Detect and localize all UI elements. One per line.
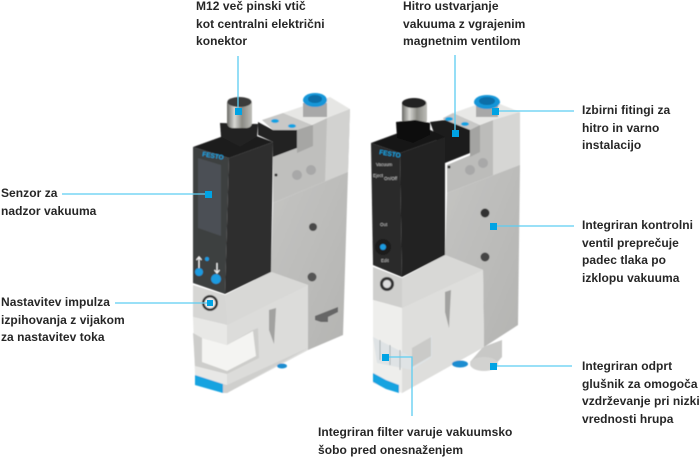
label: silencer: vzdrževanje pri nizki [582,394,700,408]
white lower housing [225,272,308,393]
black display body [225,142,273,294]
Festo logo and labels: Edit [381,258,390,263]
filter window [193,328,259,374]
left device [193,93,350,393]
blue button [375,239,391,255]
label: M12 connector: kot centralni električni [196,17,325,31]
Festo logo and labels: FESTO [379,149,401,160]
Festo logo and labels: Out [380,222,388,227]
label: fittings: Izbirni fitingi za [582,103,670,117]
label: sensor: nadzor vakuuma [1,204,96,218]
label: ejector pulse: za nastavitev toka [1,330,105,344]
upper metal body [273,109,350,203]
M12 connector [220,123,258,147]
label: sensor: Senzor za [1,186,57,200]
label: fast vacuum [403,0,525,48]
label: fast vacuum: vakuuma z vgrajenim [403,17,525,31]
Festo logo and labels: Eject [373,173,384,178]
leader lines [62,55,574,416]
lower metal plate [445,165,520,347]
flow adjustment screw [202,295,218,311]
flow adjustment screw [380,277,394,291]
label: silencer: Integriran odprt [582,359,672,373]
lower metal plate [271,172,348,350]
top blue markers [445,117,469,126]
Festo logo and labels: Vacuum [376,162,392,167]
label: check valve: Integriran kontrolni [582,218,693,232]
label: check valve: izklopu vakuuma [582,271,679,285]
Festo logo and labels [373,149,401,263]
Festo logo and labels: On/Off [384,176,398,181]
label: check valve: ventil preprečuje [582,236,679,250]
label: sensor [1,186,96,218]
blue push-in fitting [476,104,498,117]
silencer [470,340,502,370]
transparent filter [373,335,432,370]
label: fittings: hitro in varno [582,121,659,135]
blue push-in fitting [303,103,327,117]
label: ejector pulse: Nastavitev impulza [1,295,110,309]
label: fittings: instalacijo [582,138,641,152]
solenoid valve block [258,122,297,157]
blue bottom fitting [452,360,468,368]
label: ejector pulse [1,295,125,344]
label: filter: šobo pred onesnaženjem [318,443,463,457]
upper metal body [447,112,520,193]
label: silencer: vrednosti hrupa [582,412,673,426]
blue base strip [195,375,223,393]
label: filter: Integriran filter varuje vakuumsko [318,425,512,439]
label: check valve: padec tlaka po [582,253,666,267]
silver valve plate [443,113,480,130]
solenoid valve block [430,120,470,163]
label: ejector pulse: izpihovanja z vijakom [1,313,125,327]
label: silencer: glušnik za omogoča [582,377,698,391]
silver valve plate [262,113,312,130]
label: fast vacuum: magnetnim ventilom [403,34,521,48]
label: silencer [582,359,700,426]
right device [371,95,520,393]
blue base strip [373,373,399,393]
black display body [400,137,445,277]
leader markers [205,108,499,370]
bottom blue fitting [277,364,287,368]
label: filter [318,425,512,457]
M12 connector [402,100,427,124]
label: check valve [582,218,693,285]
label: M12 connector: konektor [196,34,247,48]
label: M12 connector [196,0,325,48]
display window [198,158,221,236]
top blue markers [271,119,296,128]
buttons [195,257,221,284]
white lower housing [402,255,484,393]
Festo logo: FESTO [202,151,224,162]
label: fittings [582,103,670,152]
